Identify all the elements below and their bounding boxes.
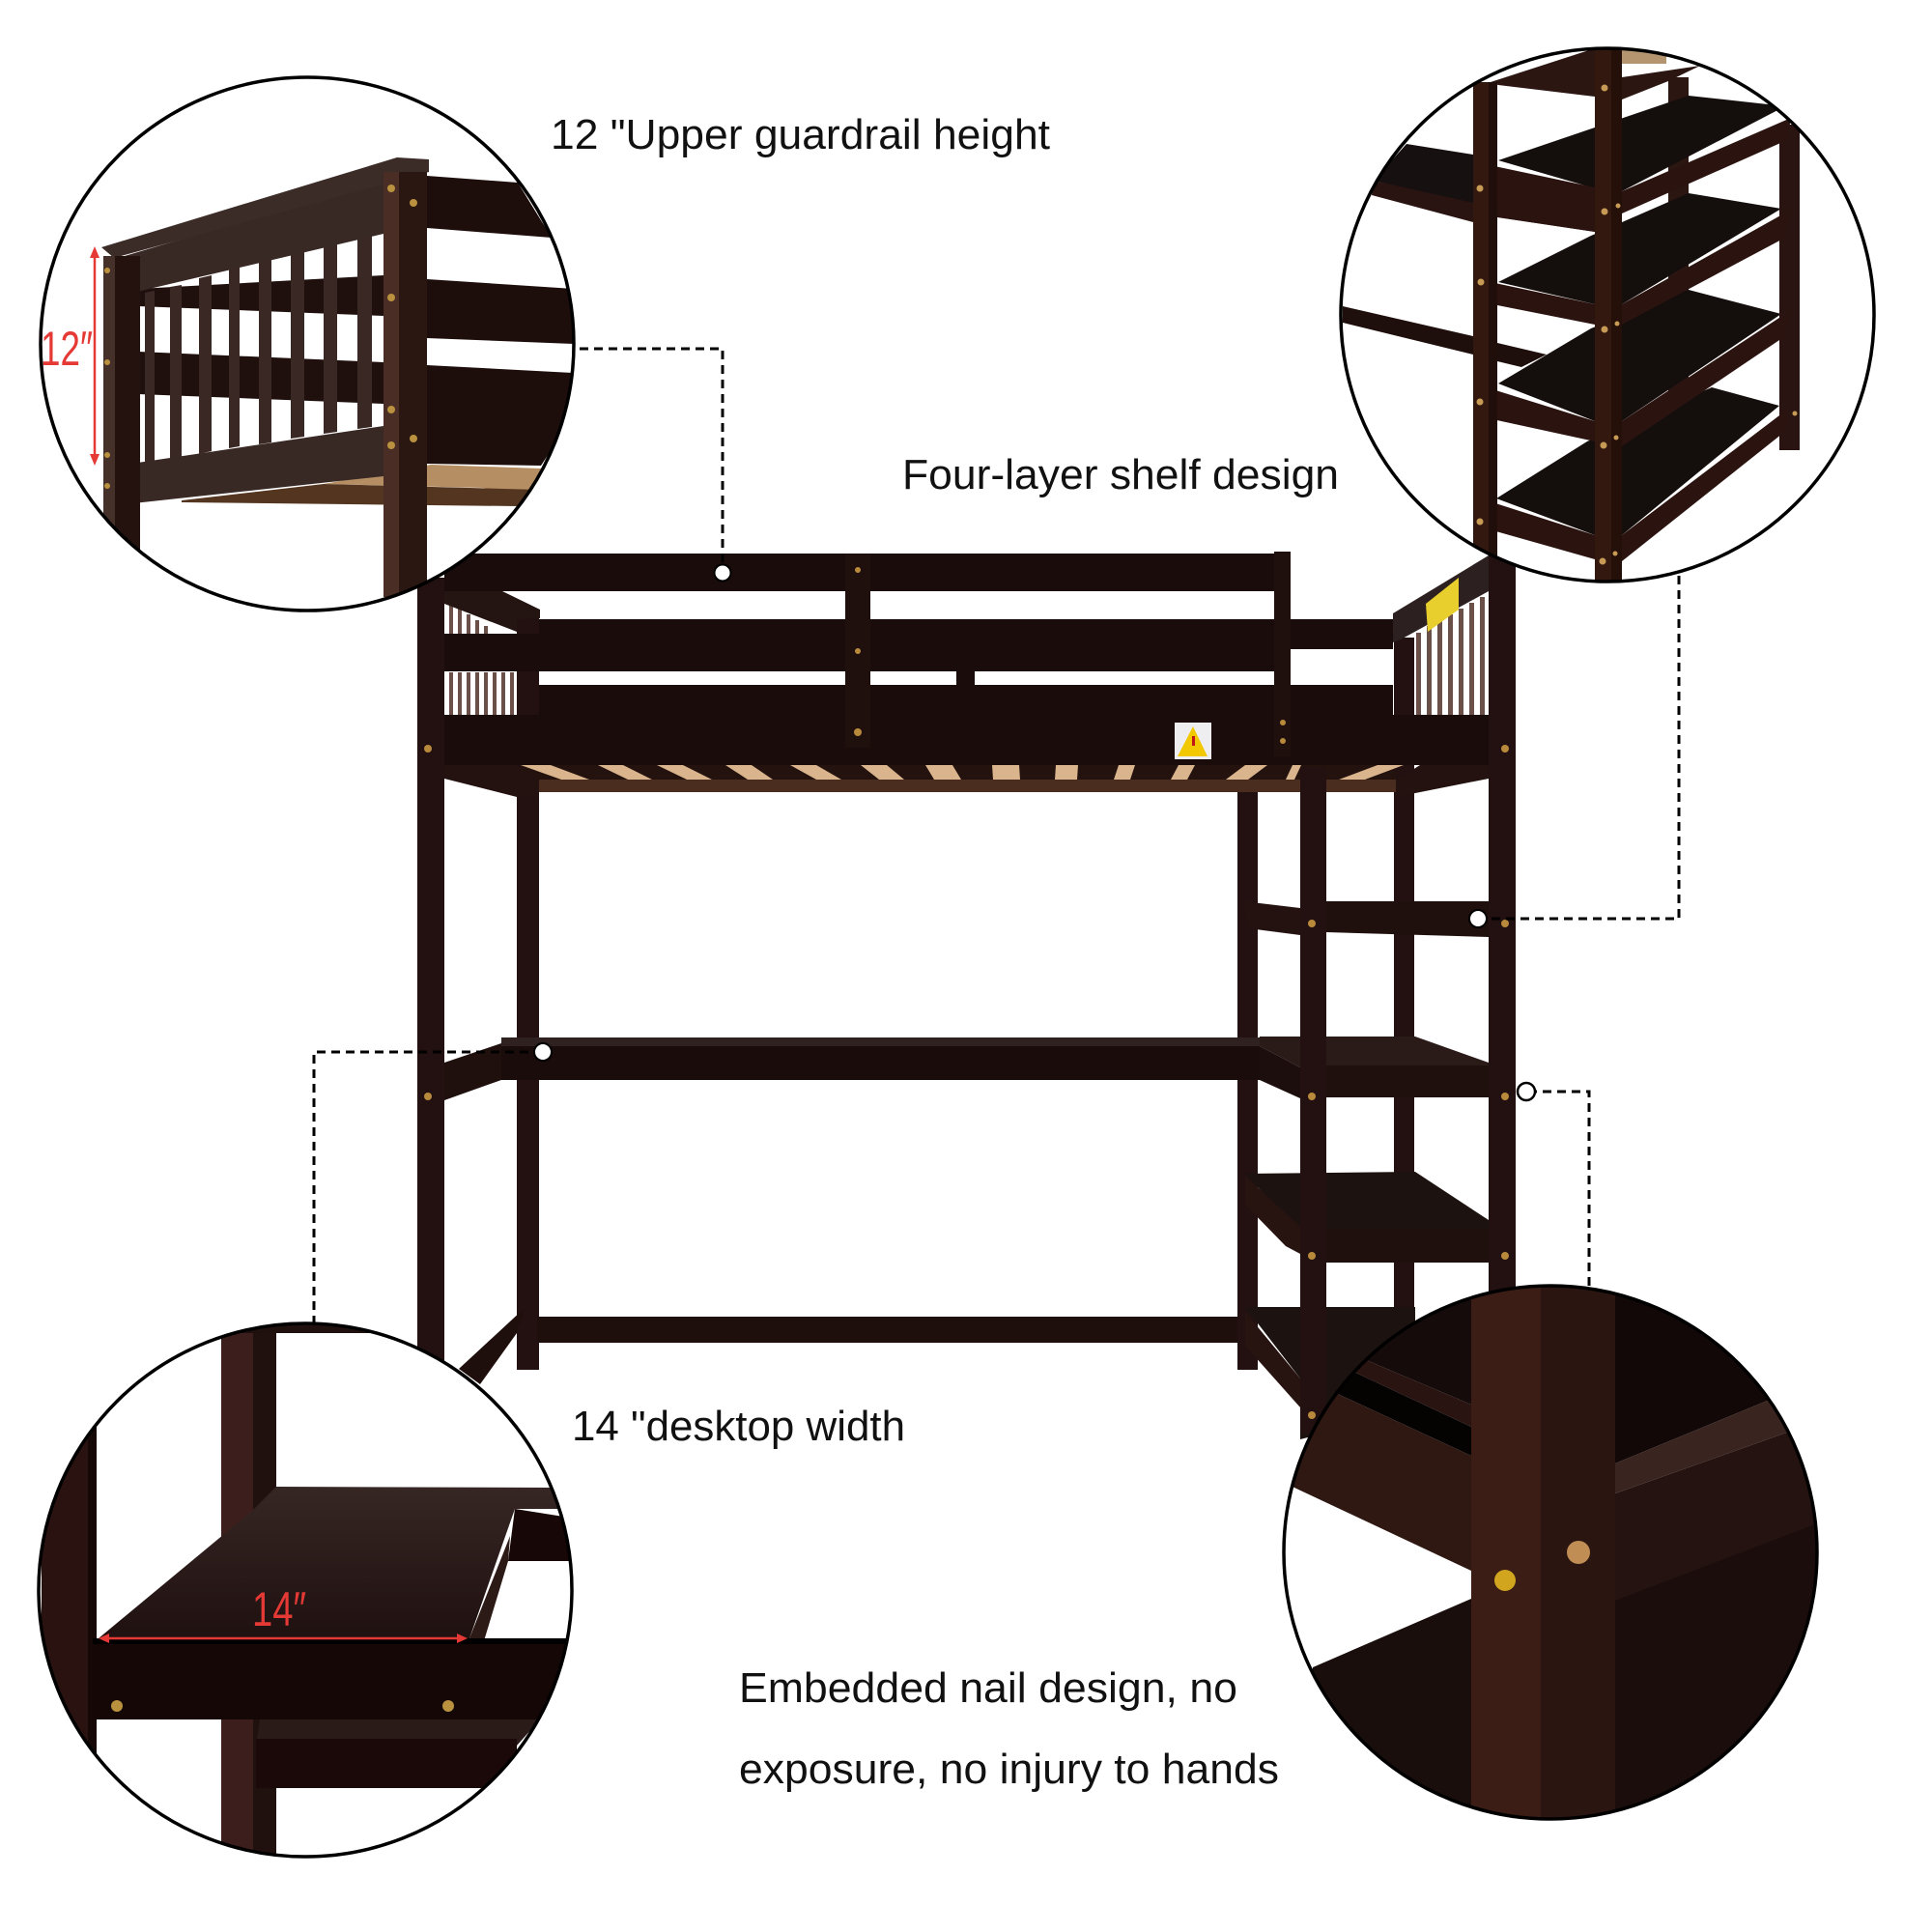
- shelves: screws: [1476, 85, 1797, 564]
- guardrail: side rails beyond post: [427, 176, 574, 466]
- dashed connector: shelves: [1480, 576, 1679, 919]
- guardrail: spindles: [145, 231, 372, 464]
- nail: left beam: [1293, 1394, 1471, 1571]
- bed: right headboard panel: [1393, 555, 1489, 642]
- desktop: top surface: [99, 1487, 560, 1638]
- bed: lower shelves behind ladder: [1243, 901, 1489, 1439]
- nail: lower left shelf: [1312, 1599, 1471, 1805]
- guardrail: left post: [103, 256, 140, 555]
- desktop: left post: [42, 1427, 97, 1753]
- nail: right panel: [1615, 1433, 1814, 1601]
- dashed connector: desktop: [314, 1052, 541, 1324]
- shelves: rear post: [1668, 77, 1689, 390]
- shelves: front rails: [1491, 118, 1791, 561]
- panel: shelf detail circle: [1341, 47, 1874, 583]
- guardrail: screws: [104, 185, 417, 489]
- caption: embedded nail line 1: Embedded nail design, no: [739, 1664, 1237, 1712]
- dashed connector: nail: [1528, 1092, 1589, 1288]
- bed: right headboard spindles: [1416, 597, 1485, 715]
- bed: guardrails: [444, 554, 1489, 765]
- guardrail: back rails: [138, 275, 384, 404]
- desktop: right dark rail: [508, 1509, 576, 1561]
- guardrail: top panel and bottom panel: [125, 180, 384, 504]
- bed: brown under-rail: [539, 780, 1396, 792]
- desktop: front apron: [93, 1638, 576, 1719]
- icon: yellow warning sticker: [1175, 723, 1211, 759]
- icon: yellow warning label on headboard: [1426, 578, 1459, 632]
- bed: desk: [444, 1037, 1260, 1100]
- shelves: desk section at left: [1343, 144, 1595, 367]
- nail: dark band: [1338, 1373, 1471, 1456]
- guardrail: bed slats and brown rail: [182, 465, 541, 506]
- shelves: top beam and bed slats glimpse: [1491, 48, 1700, 99]
- red arrow: 12 inch height: [90, 246, 99, 466]
- bed: wooden slats: [521, 765, 1404, 780]
- guardrail: right post: [384, 172, 427, 597]
- loft bed main illustration: [417, 552, 1516, 1439]
- guardrail: cap: [101, 157, 429, 258]
- bed: lower stretcher and diagonal: [459, 1309, 1237, 1384]
- nail: vertical post: [1471, 1280, 1615, 1826]
- nail: upper left dark area: [1368, 1299, 1471, 1405]
- circle outline: [41, 77, 574, 611]
- caption: desktop width: 14 "desktop width: [572, 1403, 905, 1450]
- caption: shelf design: Four-layer shelf design: [902, 451, 1339, 498]
- bed: brass screws: [424, 567, 1509, 1419]
- nail: lower right shelf: [1615, 1525, 1815, 1808]
- nail: thin rail: [1356, 1360, 1471, 1427]
- desktop: centre post: [221, 1323, 376, 1864]
- circle outline: [1284, 1286, 1817, 1819]
- marker dots: [534, 564, 1535, 1100]
- red label: 12 inches: 12″: [41, 322, 93, 376]
- panel: embedded nail detail circle: [1282, 1284, 1819, 1821]
- red label: 14 inches: 14″: [252, 1582, 306, 1636]
- bed: guard braces: [845, 552, 1291, 756]
- shelves: back right post: [1779, 125, 1800, 450]
- shelves: front posts: [1473, 47, 1622, 583]
- circle outline: [39, 1323, 572, 1857]
- bed: left headboard panel: [444, 591, 540, 632]
- nail: right beam top: [1615, 1401, 1787, 1493]
- icon: tan screw: [1567, 1541, 1590, 1564]
- bed: front posts and ladder: [417, 555, 1516, 1434]
- bed: under-frame sides: [444, 765, 1489, 797]
- panel: desktop detail circle: [39, 1323, 576, 1865]
- bed: slat band: [521, 765, 1396, 780]
- red arrow: 14 inch width: [99, 1634, 468, 1643]
- icon: gold screw: [1494, 1570, 1516, 1591]
- desktop: lower shelf: [256, 1719, 540, 1788]
- bed: rear legs and posts: [517, 610, 1414, 1370]
- shelves: surfaces: [1496, 96, 1785, 535]
- panel: guardrail detail circle: [41, 77, 574, 611]
- nail: upper right dark area: [1615, 1295, 1768, 1463]
- caption: guardrail height: 12 "Upper guardrail height: [551, 111, 1050, 158]
- caption: embedded nail line 2: exposure, no injury to hands: [739, 1746, 1279, 1793]
- desktop: screws: [111, 1700, 454, 1712]
- dashed connector: guardrail: [580, 349, 723, 570]
- circle outline: [1341, 48, 1874, 582]
- bed: left headboard spindles: [449, 604, 514, 715]
- desktop: side edge: [469, 1536, 510, 1644]
- bed: back rails: [539, 619, 1393, 715]
